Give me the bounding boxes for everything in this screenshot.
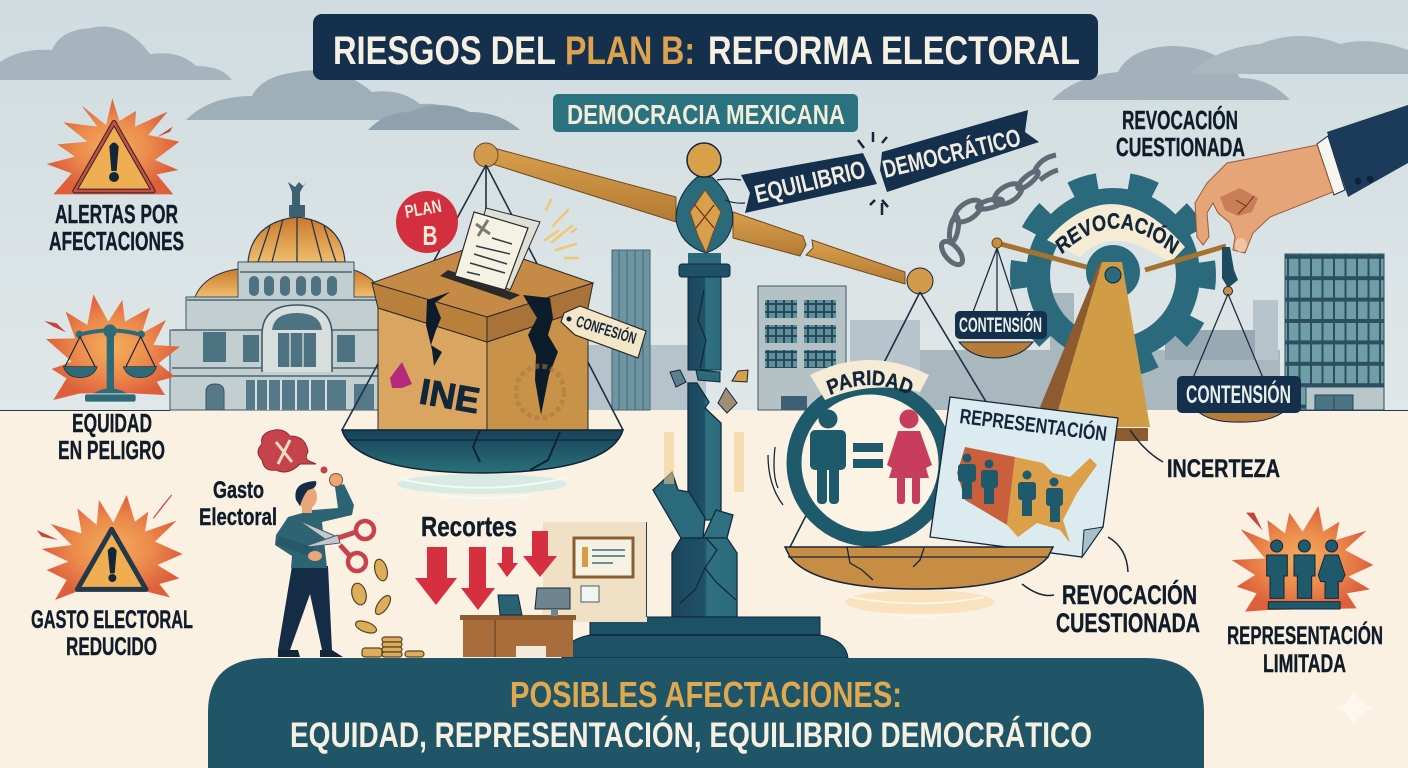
- banner: paridad: PARIDAD: [826, 370, 912, 395]
- subtitle badge: DEMOCRACIA MEXICANA: [567, 99, 845, 130]
- label: revocacion cuestionada bottom: REVOCACIÓN: [1062, 579, 1197, 610]
- INE logo: INE: [417, 371, 483, 421]
- tag: Confesion: CONFESIÓN: [574, 312, 639, 348]
- right scale strings: [790, 292, 1003, 547]
- ballot paper: [455, 208, 540, 290]
- small scale: left contencion: CONTENSIÓN: [959, 313, 1042, 337]
- title banner: REFORMA ELECTORAL: [708, 29, 1080, 73]
- small scale: right contencion: [1177, 247, 1301, 422]
- person cutting: [275, 474, 374, 657]
- title banner: [313, 14, 1098, 80]
- ribbon: Equilibrio democratico: EQUILIBRIO: [752, 156, 868, 209]
- equal sign: [853, 443, 883, 468]
- office wall: [543, 522, 647, 622]
- label: equidad en peligro: EN PELIGRO: [58, 435, 165, 465]
- label: representacion limitada: [1227, 620, 1383, 678]
- sparks: [545, 200, 578, 258]
- subtitle badge: [553, 94, 858, 132]
- label: gasto electoral: [199, 477, 277, 531]
- clouds: [0, 26, 1408, 130]
- label: revocacion cuestionada top: CUESTIONADA: [1116, 132, 1245, 162]
- falling coins: [349, 558, 424, 657]
- label: revocacion cuestionada top: [1116, 105, 1245, 162]
- burst: gasto electoral reducido: [37, 495, 183, 600]
- title banner: PLAN B:: [565, 29, 695, 73]
- right office tower: [1285, 254, 1384, 410]
- thought bubble: [258, 430, 328, 474]
- tag: Confesion: [561, 306, 646, 358]
- label: revocacion cuestionada top: REVOCACIÓN: [1122, 105, 1238, 135]
- gear: revocacion: REVOCACIÓN: [1054, 213, 1180, 254]
- gear: revocacion: [992, 173, 1226, 441]
- emblem: [516, 366, 564, 418]
- bottom banner: EQUIDAD, REPRESENTACIÓN, EQUILIBRIO DEMOCRÁTICO: [290, 715, 1092, 755]
- label: revocacion cuestionada bottom: CUESTIONADA: [1056, 608, 1200, 638]
- label: gasto electoral: Electoral: [199, 504, 277, 531]
- distant skyline: [0, 250, 1408, 410]
- left scale pan: [342, 430, 623, 498]
- small scale: right contencion: CONTENSIÓN: [1186, 379, 1291, 409]
- parity ring: [786, 360, 945, 546]
- sparkle watermark: [1334, 688, 1374, 728]
- small scale: left contencion: [955, 248, 1047, 358]
- chain: [938, 155, 1058, 268]
- label: gasto electoral reducido: GASTO ELECTORAL: [31, 606, 193, 634]
- title banner: RIESGOS DEL: [333, 29, 556, 73]
- burst: equidad en peligro: [44, 294, 180, 402]
- label: alertas por afectaciones: [49, 199, 184, 256]
- burst: alertas por afectaciones: [47, 98, 179, 194]
- label: incerteza: INCERTEZA: [1167, 455, 1280, 483]
- label: recortes: Recortes: [421, 511, 517, 542]
- ribbon: Equilibrio democratico: [717, 110, 1039, 215]
- ballot box: INE: [372, 244, 593, 470]
- bottom banner: [208, 658, 1204, 768]
- burst: representacion limitada: [1232, 506, 1373, 612]
- label: alertas por afectaciones: AFECTACIONES: [49, 226, 184, 256]
- scale post upper part and beam: [474, 143, 933, 413]
- badge: Plan B: PLAN: [403, 196, 443, 222]
- paper: representacion: REPRESENTACIÓN: [958, 404, 1108, 446]
- paper: representacion: [930, 397, 1118, 557]
- icon: man: [810, 410, 846, 504]
- banner: paridad: [810, 360, 929, 400]
- label: representacion limitada: LIMITADA: [1263, 650, 1346, 678]
- label: revocacion cuestionada bottom: [1022, 535, 1200, 638]
- right scale pan: [785, 547, 1053, 616]
- icon: woman: [887, 410, 932, 504]
- crack lines: [426, 292, 558, 470]
- INE logo: [390, 362, 483, 421]
- map: [957, 447, 1097, 543]
- hand pulling: [1195, 105, 1408, 253]
- badge: Plan B: B: [422, 220, 438, 251]
- bottom banner: POSIBLES AFECTACIONES:: [510, 674, 902, 715]
- badge: Plan B: [396, 191, 458, 253]
- label: equidad en peligro: [58, 408, 165, 465]
- palace: Bellas Artes: [170, 182, 385, 410]
- scale post lower part: [562, 383, 848, 658]
- label: alertas por afectaciones: ALERTAS POR: [55, 199, 178, 229]
- left scale strings: [342, 165, 623, 430]
- red cut arrows: [415, 531, 557, 610]
- label: equidad en peligro: EQUIDAD: [72, 408, 152, 438]
- label: gasto electoral reducido: [31, 606, 193, 661]
- label: gasto electoral reducido: REDUCIDO: [66, 633, 157, 661]
- desk: [460, 588, 576, 657]
- label: gasto electoral: Gasto: [213, 477, 264, 504]
- label: incerteza: [1130, 430, 1280, 483]
- ribbon: Equilibrio democratico: DEMOCRÁTICO: [880, 123, 1024, 184]
